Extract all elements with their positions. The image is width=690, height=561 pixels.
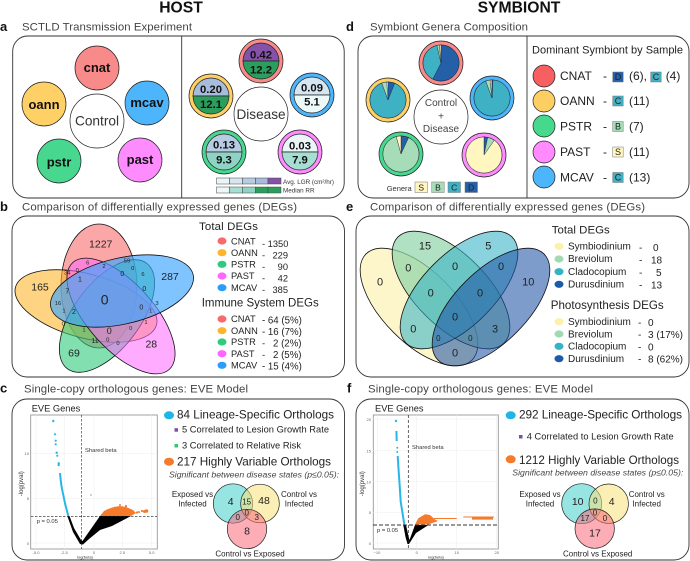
legend: immune system DEGs: PSTR [231, 337, 256, 347]
legend: photosynthesis DEGs: - [638, 342, 641, 354]
legend: total DEGs: - [262, 285, 265, 295]
four-way venn diagram: 0 [468, 334, 473, 343]
legend: photosynthesis DEGs: Breviolum [568, 330, 612, 340]
four-way venn diagram: 0 [452, 347, 458, 359]
disease group circles: 7.9 [292, 154, 308, 166]
volcano scatter plot: −10 [374, 550, 381, 555]
volcano scatter plot: -log(pval) [360, 471, 366, 496]
volcano scatter plot: 5 [369, 510, 372, 515]
center label: + [438, 112, 444, 122]
panel e: symbiont DEGs: Comparison of differentially expressed genes (DEGs) [370, 202, 645, 214]
dominant symbiont legend: C [615, 96, 622, 106]
panel d: symbiont genera composition: d [346, 19, 354, 34]
control group circles: oann [28, 97, 60, 112]
disease group circles: 0.20 [200, 84, 222, 96]
legend: total DEGs: - [639, 280, 642, 292]
lineage-specific points [52, 420, 68, 516]
three-way venn: Exposed vs [519, 490, 561, 499]
panel b: host DEGs [0, 199, 344, 392]
dominant symbiont legend: C [615, 172, 622, 182]
three-way venn: Infected [632, 500, 661, 509]
five-way venn diagram: 0 [116, 341, 120, 347]
three-way venn: 17 [589, 528, 601, 540]
legend: total DEGs: 229 [272, 250, 288, 260]
five-way venn diagram: 1 [82, 327, 86, 333]
three-way venn [519, 484, 665, 559]
three-way venn [172, 484, 317, 559]
four-way venn diagram: 0 [452, 261, 458, 273]
legend: photosynthesis DEGs: - [638, 354, 641, 366]
legend: photosynthesis DEGs: 3 (17%) [648, 330, 683, 341]
five-way venn diagram: 34 [64, 271, 71, 277]
legend: immune system DEGs: OANN [231, 326, 258, 336]
disease group circles: 0.42 [250, 50, 272, 62]
dominant symbiont legend: PSTR [560, 120, 592, 134]
lineage-specific legend: 292 Lineage-Specific Orthologs [519, 408, 682, 422]
legend: immune system DEGs: - 15 (4%) [262, 362, 302, 372]
dominant symbiont legend: (7) [629, 120, 644, 134]
volcano scatter plot: -log(pval) [19, 471, 25, 496]
five-way venn diagram: 1 [149, 309, 152, 315]
dominant symbiont legend: - [603, 69, 607, 83]
three-way venn: Exposed vs [172, 490, 213, 499]
legend: photosynthesis DEGs: - [638, 318, 641, 329]
three-way venn: 0 [593, 496, 598, 506]
legend: photosynthesis DEGs: - [638, 330, 641, 341]
volcano scatter plot: 0 [27, 541, 30, 546]
legend: total DEGs: MCAV [231, 283, 258, 293]
disease group circles: 12.1 [200, 99, 222, 111]
three-way venn: 0 [244, 508, 249, 518]
panel f: symbiont EVE model: Single-copy orthologous genes: EVE Model [368, 384, 593, 396]
four-way venn diagram: 10 [522, 277, 534, 289]
five-way venn diagram: 7 [65, 288, 69, 296]
five-way venn diagram: 28 [145, 339, 157, 351]
five-way venn diagram: 0 [129, 326, 132, 332]
center label: Control [425, 98, 457, 109]
disease group circles: 0.03 [289, 140, 311, 152]
three-way venn: Control vs Exposed [563, 550, 632, 559]
disease group circles: 5.1 [304, 96, 320, 108]
lineage-specific legend: 84 Lineage-Specific Orthologs [177, 409, 334, 422]
five-way venn diagram: 0 [142, 286, 146, 293]
volcano scatter plot: 5.0 [149, 550, 155, 555]
legend: total DEGs: - [639, 268, 642, 279]
control group circles: pstr [47, 154, 71, 170]
disease group circles [189, 39, 334, 174]
volcano scatter plot [19, 404, 157, 560]
volcano scatter plot: log(beta) [428, 554, 445, 560]
disease group circles: 9.3 [216, 154, 232, 166]
three-way venn: Control vs [281, 490, 317, 499]
control group circles: past [127, 152, 154, 167]
legend: total DEGs: Cladocopium [568, 267, 626, 278]
dominant symbiont legend: OANN [560, 94, 595, 108]
three-way venn: 17 [581, 514, 590, 523]
center label: Disease [423, 124, 459, 135]
five-way venn diagram: 6 [86, 260, 89, 266]
panel b: host DEGs: b [0, 199, 8, 214]
disease group circles: 0.09 [301, 82, 323, 94]
five-way venn diagram: 1 [78, 276, 82, 284]
three-way venn: 0 [603, 514, 608, 523]
genera legend: C [451, 182, 457, 192]
legend: immune system DEGs [202, 298, 319, 372]
volcano scatter plot: 5 [27, 496, 30, 501]
legend: total DEGs: 385 [272, 285, 288, 295]
panel b: host DEGs: Comparison of differentially expressed genes (DEGs) [22, 202, 297, 214]
panel c: host EVE model: Single-copy orthologous genes: EVE Model [24, 384, 248, 396]
lineage-specific legend: 3 Correlated to Relative Risk [182, 441, 301, 451]
non-significant points [67, 516, 131, 544]
five-way venn diagram: 0 [139, 304, 143, 312]
legend: total DEGs: Total DEGs [199, 221, 258, 233]
colour scale legend: Avg. LGR (cm²/hr) [283, 179, 334, 186]
five-way venn diagram: 2 [102, 264, 106, 270]
legend: photosynthesis DEGs: 8 (62%) [648, 354, 683, 366]
control group circles: cnat [84, 60, 111, 75]
dominant symbiont legend: C [653, 72, 660, 82]
legend: total DEGs: CNAT [231, 236, 256, 246]
panel d: symbiont genera composition [346, 19, 689, 198]
three-way venn: 3 [254, 513, 259, 522]
legend: total DEGs: - [262, 250, 265, 260]
genera legend: Genera [387, 184, 413, 193]
legend: total DEGs: - 1350 [262, 239, 288, 249]
panel f: symbiont EVE model: f [347, 381, 352, 396]
dominant symbiont legend: CNAT [560, 69, 592, 83]
panel a: SCTLD transmission experiment: SCTLD Transmission Experiment [22, 22, 193, 34]
volcano scatter plot: 10 [25, 451, 30, 456]
legend: photosynthesis DEGs [551, 299, 683, 366]
disease group circles: 12.2 [250, 64, 272, 76]
legend: immune system DEGs: - 16 (7%) [262, 327, 302, 338]
legend: immune system DEGs: - [262, 338, 265, 348]
five-way venn diagram: 0 [120, 271, 124, 278]
four-way venn diagram: 0 [452, 312, 458, 324]
four-way venn diagram: 0 [377, 277, 383, 289]
five-way venn diagram: 2 [72, 309, 76, 316]
highly variable points [100, 504, 148, 516]
four-way venn diagram: 0 [405, 262, 411, 274]
highly variable legend [506, 454, 684, 477]
five-way venn diagram: 11 [91, 338, 99, 345]
legend: photosynthesis DEGs: 0 [648, 342, 654, 354]
panel a: SCTLD transmission experiment: a [0, 19, 8, 34]
dominant symbiont legend: - [603, 120, 607, 134]
dominant symbiont legend: (4) [666, 69, 680, 83]
legend: total DEGs: 18 [651, 256, 663, 266]
four-way venn diagram: 0 [436, 334, 441, 343]
control group circles: mcav [130, 95, 164, 110]
volcano scatter plot: 20 [367, 417, 372, 422]
volcano scatter plot: p = 0.05 [377, 528, 398, 534]
legend: photosynthesis DEGs: Durusdinium [568, 354, 624, 365]
heading: HOST: HOST [159, 0, 203, 16]
five-way venn diagram: 6 [141, 272, 145, 278]
dominant symbiont legend: S [615, 147, 621, 157]
legend: total DEGs: OANN [231, 248, 258, 258]
legend: total DEGs: - [639, 256, 642, 266]
colour scale legend: Median RR [283, 188, 315, 194]
five-way venn diagram: 3 [155, 301, 159, 307]
control group circles [22, 46, 169, 183]
legend: immune system DEGs: MCAV [231, 360, 258, 370]
volcano scatter plot: 0 [93, 550, 96, 555]
panel c: host EVE model: c [0, 381, 7, 396]
panel c: host EVE model [0, 381, 344, 560]
volcano scatter plot: Shared beta [412, 445, 444, 451]
legend: photosynthesis DEGs: Photosynthesis DEGs [551, 299, 664, 312]
legend: total DEGs: 42 [278, 274, 288, 284]
highly variable legend [164, 456, 340, 480]
volcano scatter plot: -5.0 [33, 550, 40, 555]
legend: immune system DEGs: - [262, 350, 265, 360]
dominant symbiont legend: (13) [629, 171, 650, 185]
dominant symbiont legend: (11) [629, 145, 649, 159]
five-way venn diagram: 1 [144, 320, 148, 326]
dominant symbiont legend: MCAV [560, 171, 594, 185]
center label [414, 90, 468, 144]
genera legend: B [435, 182, 441, 192]
three-way venn: Infected [285, 500, 313, 509]
volcano scatter plot: 2.5 [120, 550, 126, 555]
four-way venn diagram: 0 [498, 261, 504, 273]
three-way venn: Infected [526, 500, 554, 509]
lineage-specific points [395, 420, 404, 524]
lineage-specific legend: 4 Correlated to Lesion Growth Rate [527, 431, 674, 441]
genera legend: S [418, 182, 424, 192]
volcano scatter plot: 15 [367, 448, 372, 454]
legend: total DEGs [552, 225, 663, 292]
three-way venn: Control vs [629, 490, 665, 499]
four-way venn diagram: 0 [428, 287, 434, 299]
three-way venn: 8 [244, 526, 250, 538]
three-way venn: 0 [593, 508, 598, 518]
five-way venn diagram: 0 [101, 291, 109, 307]
disease group circles: Disease [236, 107, 286, 122]
legend: immune system DEGs: 2 (2%) [273, 338, 302, 350]
four-way venn diagram: 5 [485, 241, 491, 253]
panel f: symbiont EVE model [347, 381, 689, 560]
legend: total DEGs: Symbiodinium [568, 242, 631, 252]
dominant symbiont legend: - [603, 94, 607, 108]
colour scale legend [216, 178, 334, 194]
legend: total DEGs [199, 221, 288, 295]
volcano scatter plot: Shared beta [85, 448, 117, 454]
dominant symbiont legend: PAST [560, 145, 591, 159]
legend: total DEGs: PAST [231, 271, 255, 281]
five-way venn diagram: 59 [124, 258, 130, 264]
three-way venn: Control vs Exposed [215, 550, 285, 559]
legend: total DEGs: 0 [653, 243, 659, 254]
legend: total DEGs: 90 [278, 262, 288, 272]
volcano scatter plot: 0 [369, 541, 372, 546]
highly variable points [415, 514, 494, 524]
five-way venn diagram: 165 [31, 282, 49, 294]
four-way venn diagram: 0 [477, 287, 483, 299]
legend: immune system DEGs: 2 (5%) [273, 350, 302, 361]
lineage-specific legend [506, 408, 682, 441]
four-way venn diagram: 15 [419, 241, 431, 253]
legend: total DEGs: - [262, 262, 265, 272]
dominant symbiont legend: (11) [629, 94, 649, 108]
five-way venn diagram: 1 [62, 309, 66, 315]
legend: total DEGs: 13 [651, 280, 663, 292]
dominant symbiont legend: D [615, 72, 622, 82]
pie charts [366, 41, 514, 177]
highly variable legend: 1212 Highly Variable Orthologs [519, 454, 679, 467]
three-way venn: 4 [609, 496, 615, 508]
five-way venn diagram: 0 [107, 326, 112, 336]
genera legend: D [468, 182, 474, 192]
legend: immune system DEGs: Immune System DEGs [202, 298, 319, 310]
four-way venn diagram [341, 212, 569, 385]
volcano scatter plot: log(beta) [77, 554, 94, 560]
five-way venn diagram [7, 224, 201, 392]
panel a: SCTLD transmission experiment [0, 19, 344, 198]
highly variable legend: Significant between disease states (p≤0.05): [512, 467, 684, 477]
volcano scatter plot: 10 [367, 480, 372, 484]
three-way venn: 10 [572, 496, 584, 508]
volcano scatter plot: -2.5 [61, 550, 69, 555]
dominant symbiont legend: Dominant Symbiont by Sample [532, 44, 683, 56]
volcano scatter plot: 10 [454, 550, 460, 555]
volcano scatter plot: EVE Genes [32, 404, 81, 414]
volcano scatter plot: EVE Genes [375, 404, 424, 414]
lineage-specific legend [164, 409, 334, 451]
legend: total DEGs: Total DEGs [552, 225, 610, 237]
four-way venn diagram: 3 [492, 323, 498, 335]
volcano scatter plot [360, 404, 500, 560]
legend: photosynthesis DEGs: Symbiodinium [568, 317, 631, 328]
five-way venn diagram: 0 [76, 268, 79, 274]
three-way venn: 0 [235, 513, 240, 522]
highly variable legend: 217 Highly Variable Orthologs [177, 456, 331, 469]
legend: immune system DEGs: PAST [231, 349, 255, 359]
four-way venn diagram: 0 [410, 323, 416, 335]
lineage-specific legend: 5 Correlated to Lesion Growth Rate [182, 425, 329, 435]
legend: total DEGs: Durusdinium [568, 280, 624, 290]
legend: photosynthesis DEGs: 0 [648, 318, 654, 329]
dominant symbiont legend: (6), [629, 69, 647, 83]
dominant symbiont legend: - [603, 145, 607, 159]
legend: total DEGs: - [262, 274, 265, 284]
dominant symbiont legend: - [603, 171, 607, 185]
three-way venn: 15 [242, 498, 252, 506]
legend: total DEGs: - [639, 243, 642, 254]
five-way venn diagram: 1227 [89, 238, 113, 250]
legend: immune system DEGs: - 64 (5%) [262, 316, 302, 326]
five-way venn diagram: 0 [106, 338, 109, 344]
dominant symbiont legend: B [615, 122, 621, 132]
five-way venn diagram: 0 [62, 321, 65, 327]
legend: total DEGs: PSTR [231, 260, 256, 270]
non-significant points [403, 525, 428, 544]
three-way venn: Infected [178, 500, 207, 509]
heading: SYMBIONT: SYMBIONT [478, 0, 561, 16]
three-way venn: 48 [258, 495, 270, 507]
dominant symbiont legend [532, 44, 683, 188]
panel e: symbiont DEGs: e [346, 199, 353, 214]
legend: photosynthesis DEGs: Cladocopium [568, 342, 626, 352]
five-way venn diagram: 69 [68, 348, 80, 360]
disease group circles: 0.13 [213, 140, 235, 152]
legend: immune system DEGs: CNAT [231, 314, 256, 324]
legend: total DEGs: 5 [656, 268, 662, 279]
volcano scatter plot: 0 [416, 550, 419, 555]
three-way venn: 4 [228, 496, 234, 508]
genera legend [387, 182, 478, 193]
panel d: symbiont genera composition: Symbiont Genera Composition [370, 22, 528, 34]
highly variable legend: Significant between disease states (p≤0.05): [169, 470, 340, 480]
panel e: symbiont DEGs [341, 199, 689, 385]
control group circles: Control [75, 114, 119, 128]
five-way venn diagram: 287 [161, 271, 179, 283]
volcano scatter plot: 20 [494, 550, 500, 555]
five-way venn diagram: 0 [131, 266, 134, 272]
five-way venn diagram: 16 [55, 301, 61, 307]
legend: total DEGs: Breviolum [568, 254, 612, 265]
volcano scatter plot: p = 0.05 [37, 519, 58, 525]
